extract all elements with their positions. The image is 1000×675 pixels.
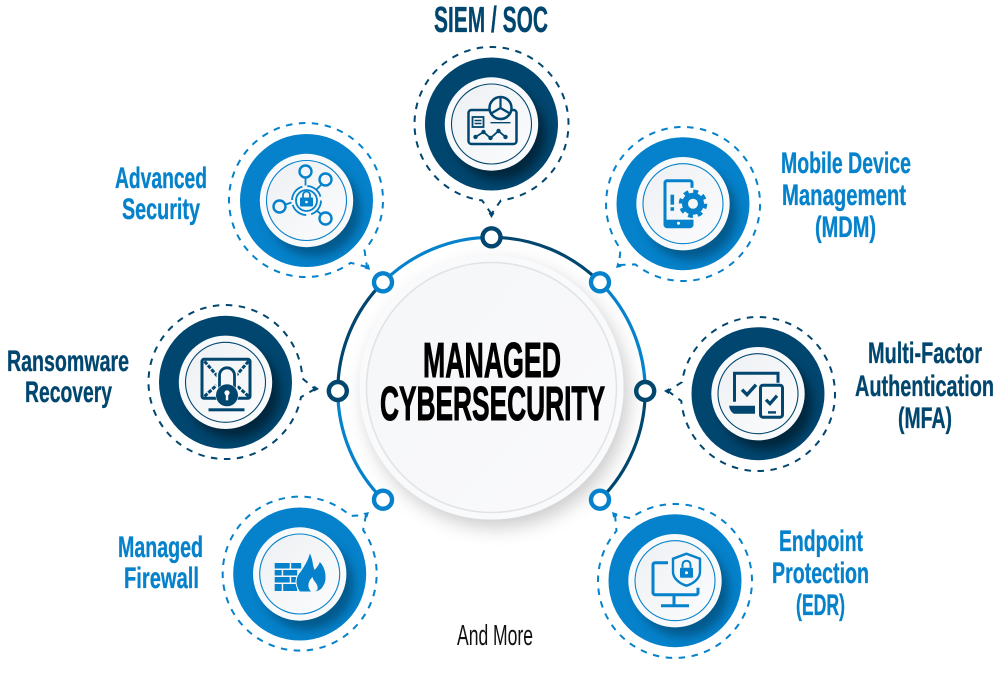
dashed callout: SIEM bbox=[415, 47, 568, 214]
label: Advanced Security: Security bbox=[122, 193, 200, 226]
label: Multi-Factor Authentication (MFA): (MFA) bbox=[898, 402, 952, 435]
icon: dashboard bbox=[468, 97, 516, 144]
label: Advanced Security: Advanced bbox=[115, 162, 207, 195]
icon: monitor and shield bbox=[653, 554, 700, 606]
badge: MDM bbox=[616, 137, 750, 270]
panel: Ransomware Recovery bbox=[7, 305, 319, 459]
center disc bbox=[360, 256, 624, 520]
icon: brick wall and flame bbox=[275, 552, 326, 592]
pointer tip: MDM bbox=[614, 262, 622, 270]
title: CYBERSECURITY bbox=[380, 378, 605, 431]
badge: Ransomware bbox=[159, 316, 292, 449]
pointer tip: EDR bbox=[610, 510, 618, 518]
label: Endpoint Protection (EDR): Protection bbox=[772, 557, 869, 590]
pointer tip: Advanced Security bbox=[364, 264, 372, 272]
pointer tip: SIEM bbox=[488, 213, 494, 218]
panel: Endpoint Protection bbox=[598, 504, 869, 658]
label: Advanced Security bbox=[115, 162, 207, 226]
badge: SIEM bbox=[425, 58, 558, 190]
dashed callout: Advanced Security bbox=[229, 123, 383, 277]
pointer tip: Firewall bbox=[363, 510, 371, 518]
label: Managed Firewall bbox=[118, 531, 203, 595]
label: Endpoint Protection (EDR): Endpoint bbox=[779, 525, 863, 558]
icon: locked screen bbox=[202, 359, 250, 411]
pointer tip: MFA bbox=[664, 388, 669, 394]
panel: Advanced Security bbox=[115, 123, 383, 277]
icon: phone and gear bbox=[665, 181, 709, 227]
dashed callout: MDM bbox=[606, 127, 760, 281]
label: Ransomware Recovery: Recovery bbox=[25, 376, 112, 409]
dashed callout: Firewall bbox=[223, 497, 377, 651]
badge: Firewall bbox=[233, 508, 366, 640]
label: Multi-Factor Authentication (MFA) bbox=[855, 337, 994, 435]
label: Endpoint Protection (EDR): (EDR) bbox=[796, 589, 845, 622]
pointer tip: Ransomware bbox=[314, 386, 319, 392]
title: MANAGED bbox=[423, 334, 561, 388]
ring nodes bbox=[329, 228, 654, 509]
heading: SIEM / SOC: SIEM / SOC bbox=[434, 0, 548, 40]
label: Ransomware Recovery bbox=[7, 345, 129, 409]
label: Mobile Device Management (MDM) bbox=[781, 147, 911, 244]
label: Endpoint Protection (EDR) bbox=[772, 525, 869, 622]
panel: Mobile Device Management bbox=[606, 127, 911, 281]
label: Managed Firewall: Managed bbox=[118, 531, 203, 564]
title bbox=[380, 334, 605, 431]
label: Mobile Device Management (MDM): (MDM) bbox=[815, 211, 876, 244]
icon: laptop and tablet bbox=[729, 373, 782, 417]
label: Mobile Device Management (MDM): Management bbox=[782, 179, 906, 212]
panel: Managed Firewall bbox=[118, 497, 377, 651]
dashed callout: MFA bbox=[668, 317, 835, 471]
badge: EDR bbox=[608, 514, 742, 647]
label: Managed Firewall: Firewall bbox=[124, 562, 199, 595]
panel: Multi-Factor Authentication bbox=[664, 317, 994, 471]
label: Ransomware Recovery: Ransomware bbox=[7, 345, 129, 378]
connecting ring bbox=[338, 237, 645, 500]
badge: Advanced Security bbox=[240, 134, 373, 267]
label: Mobile Device Management (MDM): Mobile Device bbox=[781, 147, 911, 180]
dashed callout: Ransomware bbox=[148, 305, 315, 459]
icon: network lock bbox=[274, 166, 332, 224]
panel: SIEM / SOC bbox=[415, 0, 568, 218]
footer text: And More: And More bbox=[457, 620, 533, 652]
badge: MFA bbox=[692, 327, 824, 460]
dashed callout: EDR bbox=[598, 504, 752, 658]
